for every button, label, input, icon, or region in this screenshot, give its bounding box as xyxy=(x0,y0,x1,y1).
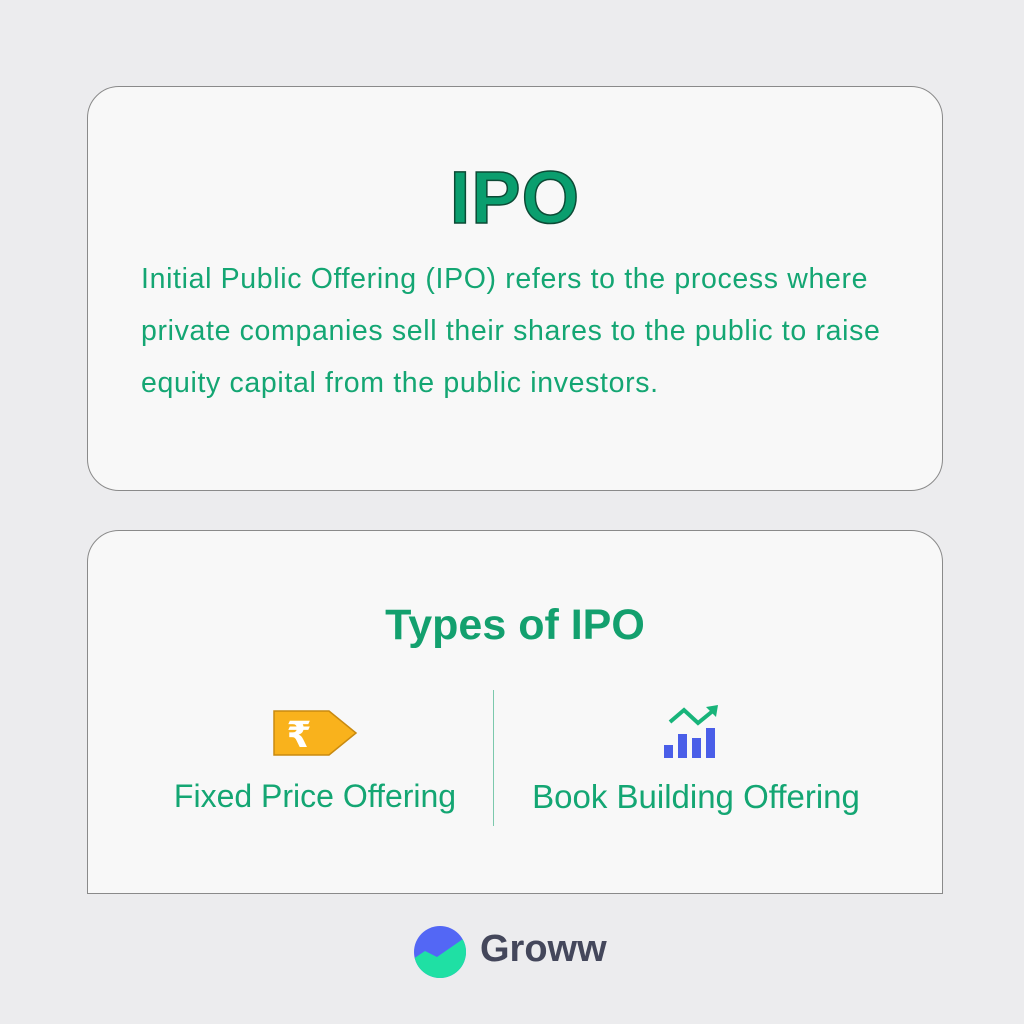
panel: definition card xyxy=(87,86,943,491)
text: Groww: Groww xyxy=(480,928,607,970)
logo: Groww xyxy=(414,926,607,978)
text block: definition: private companies sell their shares to the public to raise xyxy=(141,315,880,347)
label: Fixed Price Offering: Fixed Price Offering xyxy=(174,778,456,814)
icon: rupee price tag xyxy=(273,710,358,756)
panel: types of IPO xyxy=(87,530,943,894)
text block: definition xyxy=(141,263,880,399)
title: IPO: IPO xyxy=(450,156,580,239)
heading: Types of IPO: Types of IPO xyxy=(385,601,645,649)
divider xyxy=(493,690,494,826)
label: Book Building Offering: Book Building Offering xyxy=(532,778,860,815)
text block: definition: Initial Public Offering (IPO) refers to the process where xyxy=(141,263,868,295)
text block: definition: equity capital from the public investors. xyxy=(141,367,659,399)
icon: groww circle xyxy=(414,926,466,978)
icon: chart growth xyxy=(664,705,718,758)
icon: rupee price tag: ₹ xyxy=(286,715,312,756)
